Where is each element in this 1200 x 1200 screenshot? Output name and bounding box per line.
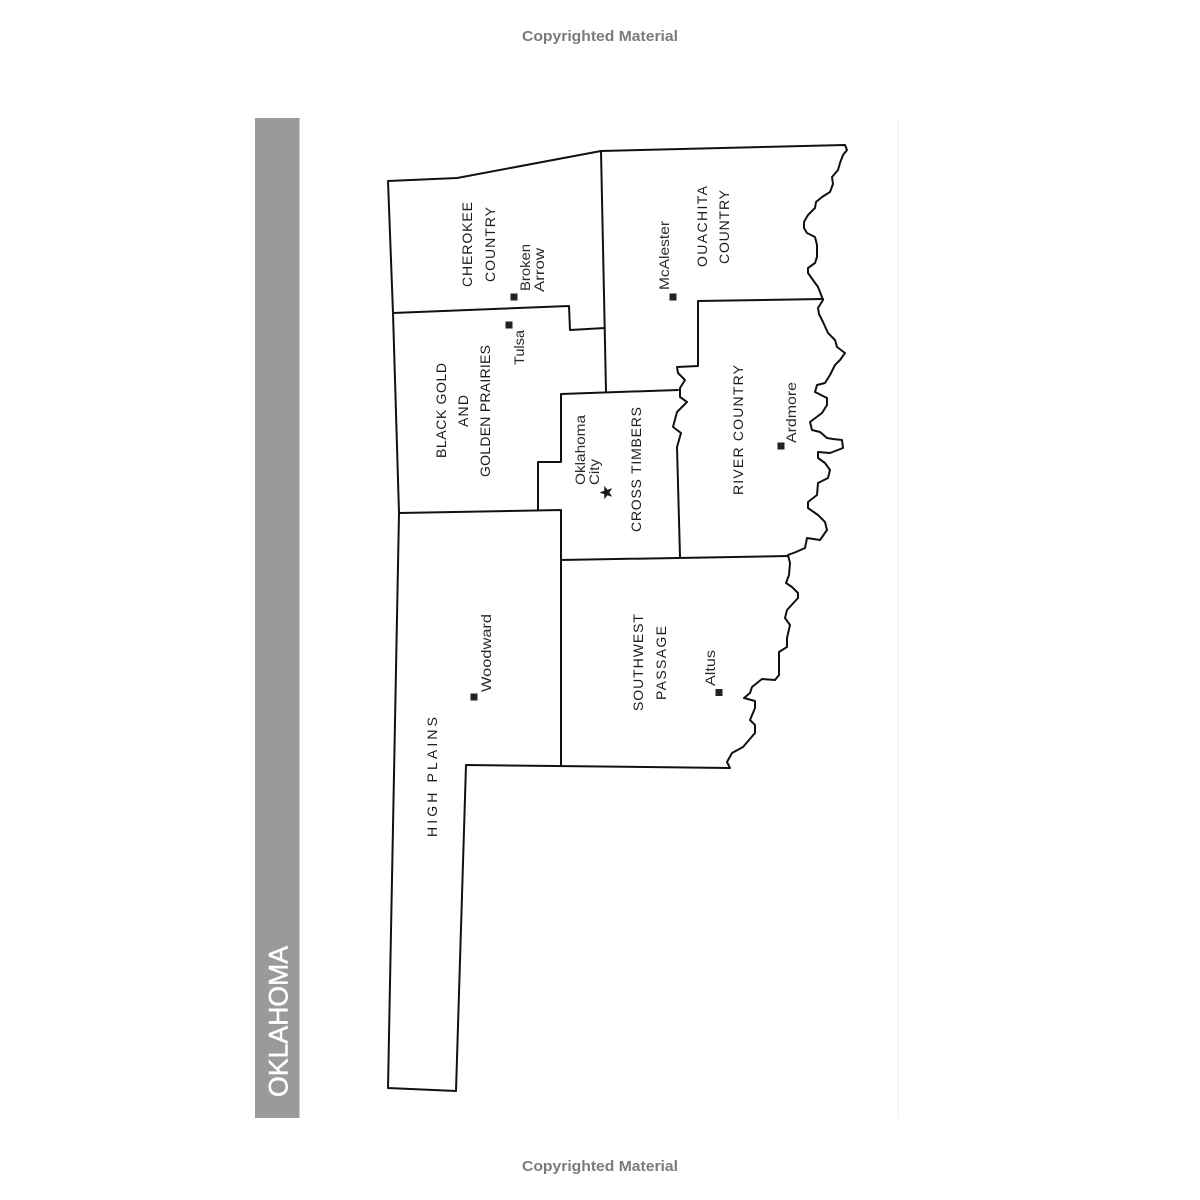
region label: Southwest Passage [630, 614, 669, 711]
region label: Ouachita Country [694, 185, 732, 267]
region label: Black Gold and Golden Prairies: GOLDEN PRAIRIES [477, 345, 493, 477]
footer: copyright notice: Copyrighted Material [522, 1159, 678, 1175]
region label: Southwest Passage: PASSAGE [653, 626, 669, 700]
region label: Black Gold and Golden Prairies: AND [455, 395, 471, 427]
capital: Oklahoma City: Oklahoma [572, 415, 588, 485]
city: Broken Arrow [510, 244, 547, 300]
region borders [393, 151, 823, 766]
region label: River Country: RIVER COUNTRY [730, 364, 746, 495]
city: Altus [702, 650, 722, 696]
city: Ardmore [778, 382, 799, 450]
city: McAlester [656, 221, 676, 300]
city: Altus: Altus [702, 650, 718, 686]
state outline [388, 145, 847, 1091]
region label: Cherokee Country [459, 202, 498, 287]
region label: Southwest Passage: SOUTHWEST [630, 614, 646, 711]
city: Broken Arrow: Broken [517, 244, 533, 291]
region label: Cherokee Country: CHEROKEE [459, 202, 475, 287]
region label: Cross Timbers: CROSS TIMBERS [628, 407, 644, 532]
city: Tulsa [506, 322, 527, 365]
region label: Ouachita Country: COUNTRY [716, 189, 732, 264]
capital: Oklahoma City [572, 415, 612, 499]
city: Broken Arrow: Arrow [531, 247, 547, 292]
map: Oklahoma regions [388, 145, 847, 1091]
city: McAlester: McAlester [656, 221, 672, 290]
city: Tulsa: Tulsa [511, 330, 527, 365]
region label: Black Gold and Golden Prairies: BLACK GOLD [433, 363, 449, 458]
region label: Ouachita Country: OUACHITA [694, 185, 710, 267]
header: copyright notice: Copyrighted Material [522, 29, 678, 45]
city: Woodward: Woodward [478, 614, 494, 692]
region label: Cherokee Country: COUNTRY [482, 206, 498, 282]
capital: Oklahoma City: City [586, 459, 602, 485]
city: Woodward [470, 614, 494, 700]
region label: High Plains: HIGH PLAINS [424, 717, 440, 837]
icon: capital star [600, 486, 612, 499]
sidebar title: OKLAHOMA [264, 946, 294, 1097]
page edge line [897, 118, 899, 1118]
region label: Black Gold and Golden Prairies [433, 345, 493, 477]
sidebar: state title bar [255, 118, 300, 1118]
city: Ardmore: Ardmore [783, 382, 799, 443]
